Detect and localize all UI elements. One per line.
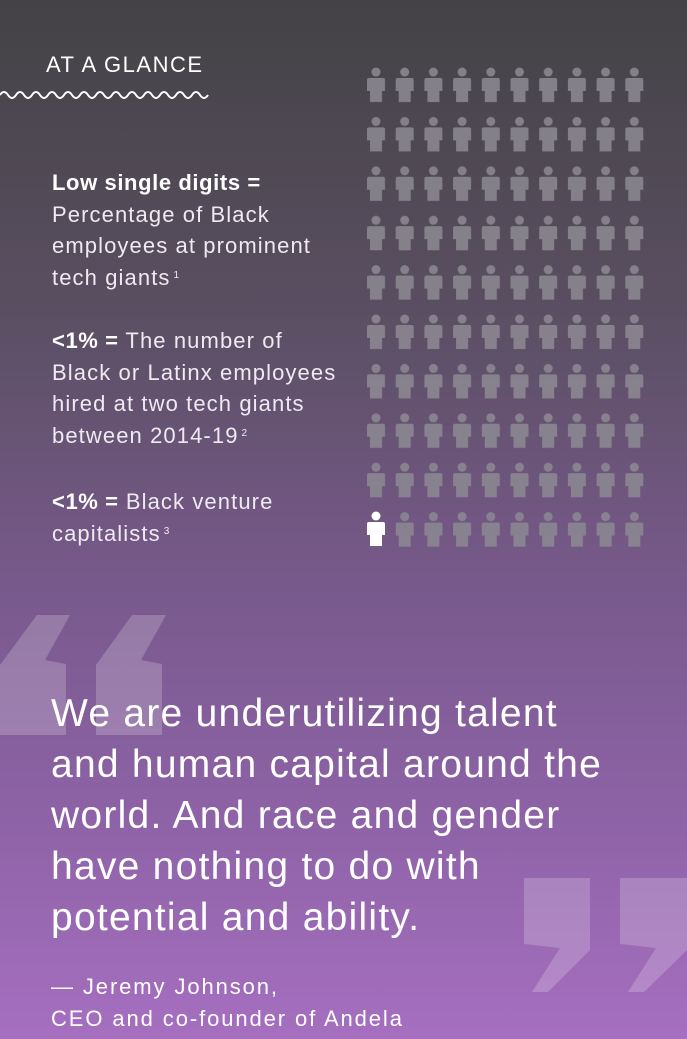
icon: close quote [524, 878, 687, 992]
stat 3 [52, 489, 273, 546]
stat 3: capitalists 3 [52, 520, 170, 546]
wavy underline [0, 91, 209, 99]
stat 1: Low single digits = [52, 170, 261, 195]
icon: highlighted person [367, 512, 385, 546]
stat 2: Black or Latinx employees [52, 360, 336, 384]
stat 3: <1% = Black venture [52, 489, 273, 514]
quote text: We are underutilizing talent [51, 692, 558, 735]
stat 2: <1% = The number of [52, 328, 283, 353]
stat 1: employees at prominent [52, 233, 311, 258]
stat 1: Percentage of Black [52, 202, 270, 226]
attribution: — Jeremy Johnson, [51, 974, 279, 999]
heading: at a glance: AT A GLANCE [46, 52, 204, 77]
stat 2: between 2014-19 2 [52, 422, 248, 448]
quote text: have nothing to do with [51, 845, 481, 888]
icon: open quote [0, 615, 166, 735]
stat 1: tech giants 1 [52, 264, 180, 290]
pictogram grid [367, 67, 654, 556]
quote text [51, 692, 602, 939]
quote text: and human capital around the [51, 743, 602, 786]
stat 2: hired at two tech giants [52, 391, 305, 416]
stat 2 [52, 328, 336, 448]
stat 1 [52, 170, 311, 290]
attribution [51, 974, 404, 1031]
attribution: CEO and co-founder of Andela [51, 1006, 404, 1031]
quote text: world. And race and gender [51, 794, 560, 837]
quote text: potential and ability. [51, 896, 420, 939]
